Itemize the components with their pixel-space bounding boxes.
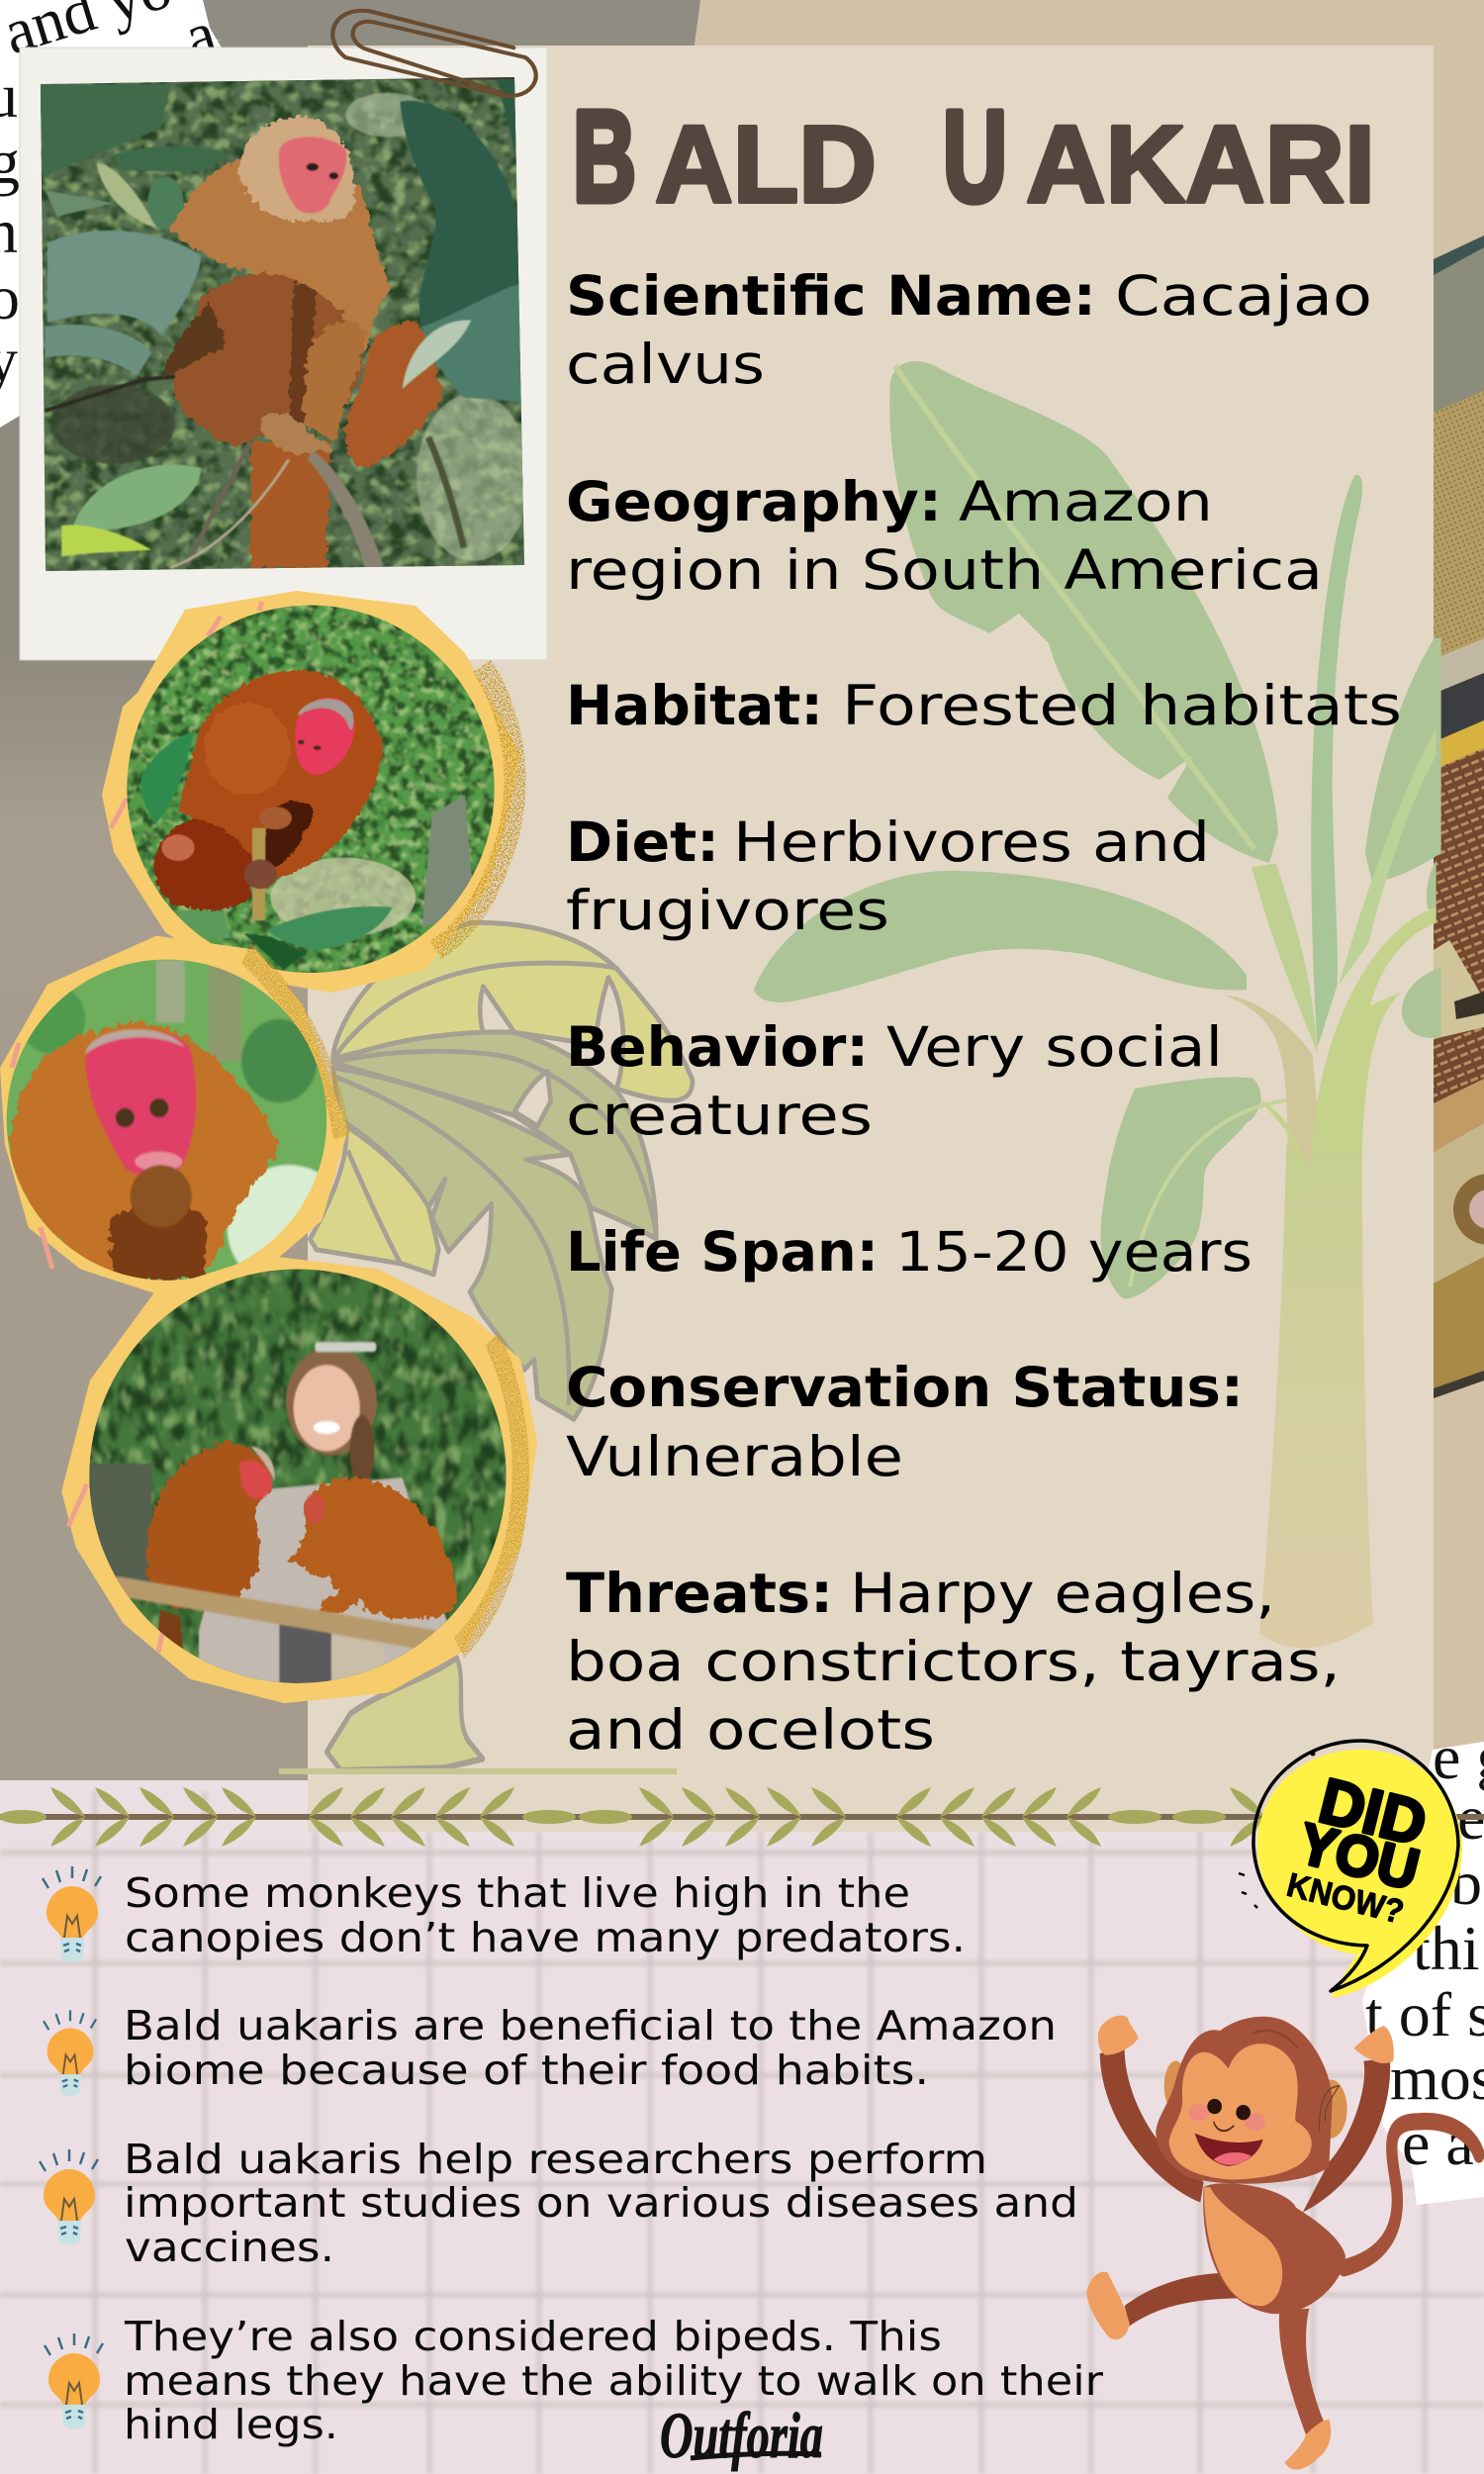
illustration: palm trunk <box>326 1659 483 1770</box>
fun fact text 1 <box>125 1869 966 1961</box>
text: threats: Harpy eagles, <box>850 1562 1275 1625</box>
background: burlap paper <box>693 0 1484 1791</box>
text: diet: Herbivores and <box>733 810 1210 874</box>
title: B <box>573 83 636 229</box>
fun fact text 1: canopies don’t have many predators. <box>125 1914 966 1961</box>
text: geography <box>566 470 1323 602</box>
text: threats: boa constrictors, tayras, <box>566 1630 1341 1693</box>
polaroid frame <box>20 48 547 660</box>
text: scientific name: Scientific Name: <box>566 264 1096 328</box>
title: U <box>943 83 1007 229</box>
fun fact text 2: Bald uakaris are beneficial to the Amazon <box>124 2002 1057 2049</box>
background: torn newspaper scrap top left <box>0 0 224 428</box>
fun fact text 4 <box>124 2313 1103 2448</box>
fun fact text 3: vaccines. <box>125 2224 334 2271</box>
background: newspaper scrap right <box>1362 1722 1484 2205</box>
text: diet: Diet: <box>566 810 719 874</box>
callout: did you know speech bubble: KNOW? <box>1283 1866 1408 1932</box>
text: diet <box>566 810 1210 942</box>
callout: did you know speech bubble: YOU <box>1292 1811 1425 1903</box>
text: conservation status: Conservation Status: <box>566 1356 1244 1419</box>
fun fact text 4: means they have the ability to walk on their <box>124 2357 1103 2405</box>
text: threats <box>566 1562 1341 1761</box>
fun fact text 2: biome because of their food habits. <box>124 2046 929 2094</box>
photo circle 1: uakari on branch <box>102 591 520 993</box>
text: geography: Amazon <box>959 470 1213 533</box>
background: pink grid paper <box>0 1780 1484 2474</box>
text: diet: frugivores <box>566 879 889 942</box>
title <box>573 83 1375 229</box>
fun fact text 3: Bald uakaris help researchers perform <box>124 2136 987 2183</box>
icon: light bulb 1 <box>43 1866 101 1961</box>
text: threats: Threats: <box>566 1562 833 1625</box>
text: scientific name: calvus <box>566 333 765 396</box>
panel: beige fact panel <box>308 46 1434 1832</box>
logo: Outforia: Outforia <box>660 2400 823 2472</box>
callout: did you know speech bubble: DID <box>1313 1764 1434 1859</box>
photo: uakari in polaroid <box>38 75 530 574</box>
text: geography: region in South America <box>566 538 1323 602</box>
fun fact text 1: Some monkeys that live high in the <box>125 1869 910 1917</box>
icon: light bulb 4 <box>45 2333 103 2428</box>
text: life span: 15-20 years <box>895 1220 1252 1284</box>
title: ALD <box>655 104 877 226</box>
illustration: banana tree <box>754 361 1441 1648</box>
icon: light bulb 2 <box>44 2010 96 2096</box>
text: scientific name: Cacajao <box>1115 264 1372 328</box>
background: newspaper scrap right: e a <box>1402 2108 1474 2178</box>
background: vintage radio <box>1434 236 1484 1398</box>
text: behavior <box>566 1015 1223 1147</box>
fun fact text 4: hind legs. <box>124 2401 338 2448</box>
text: life span: Life Span: <box>566 1220 879 1284</box>
photo circle 2: uakari close up <box>0 936 350 1297</box>
text: geography: Geography: <box>566 470 942 533</box>
text: conservation status: Vulnerable <box>566 1425 903 1488</box>
text: conservation status <box>566 1356 1244 1488</box>
text: habitat: Forested habitats <box>842 674 1402 737</box>
paperclip <box>332 11 536 96</box>
decorative leaf branch <box>0 1787 1484 1847</box>
text: habitat <box>566 674 1402 737</box>
icon: light bulb 3 <box>40 2149 98 2244</box>
text: life span <box>566 1220 1252 1284</box>
background: newspaper scrap right: thi <box>1413 1913 1480 1983</box>
callout: did you know speech bubble <box>1239 1741 1462 1998</box>
fun fact text 3: important studies on various diseases and <box>124 2179 1078 2227</box>
text: behavior: Behavior: <box>566 1015 869 1079</box>
text: behavior: Very social <box>886 1015 1223 1079</box>
fun fact text 2 <box>124 2002 1057 2094</box>
ground line under palm <box>279 1768 677 1774</box>
text: behavior: creatures <box>566 1084 873 1147</box>
text: threats: and ocelots <box>566 1698 935 1761</box>
title: AKARI <box>1026 104 1375 226</box>
background: grey crumpled paper <box>0 0 700 1786</box>
illustration: outlined palm behind the circles <box>310 922 693 1419</box>
photo circle 3: woman with two uakaris <box>61 1255 537 1703</box>
text: scientific name <box>566 264 1372 396</box>
text: habitat: Habitat: <box>566 674 823 737</box>
fun fact text 4: They’re also considered bipeds. This <box>124 2313 942 2360</box>
fun fact text 3 <box>124 2136 1078 2271</box>
illustration: cartoon monkey <box>1086 2016 1479 2470</box>
